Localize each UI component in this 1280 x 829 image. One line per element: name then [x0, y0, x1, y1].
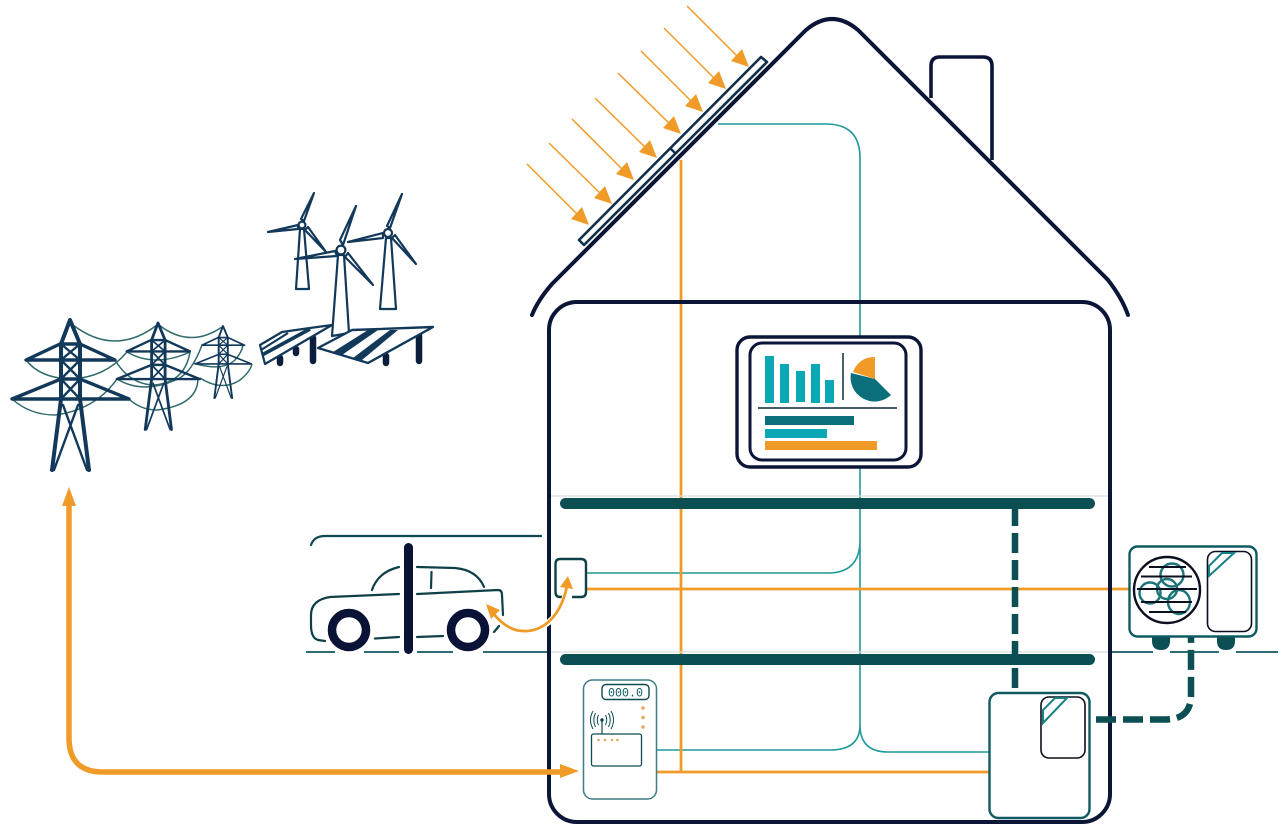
fan — [1134, 557, 1200, 623]
car charging arrow — [486, 576, 573, 631]
chimney — [931, 57, 992, 160]
solar panel on roof — [579, 57, 767, 245]
wind turbines — [268, 193, 416, 336]
floor slabs — [560, 498, 1095, 665]
panel legs — [280, 335, 419, 363]
grid feed arrow — [62, 487, 579, 778]
smart meter — [584, 680, 656, 799]
carport roof — [311, 536, 541, 545]
wallbox charger — [556, 559, 586, 597]
transmission tower large — [12, 320, 129, 470]
carport post — [404, 543, 413, 654]
tablet frame — [737, 337, 921, 467]
electrical wiring inside the house — [587, 124, 1130, 772]
transmission tower medium — [117, 323, 200, 430]
sunlight arrows — [527, 6, 749, 225]
bar chart — [765, 356, 834, 403]
heat pump outdoor unit — [1130, 546, 1256, 650]
wifi antenna — [590, 711, 614, 734]
status dots — [641, 706, 645, 729]
communication module — [592, 734, 642, 766]
solar field — [260, 325, 433, 364]
car wheels — [332, 613, 485, 647]
house walls — [549, 302, 1110, 822]
tablet dashboard — [737, 337, 921, 467]
dashed pipes between battery and heat pump — [1015, 508, 1191, 720]
right solar panel — [318, 327, 433, 363]
turbine 3 — [348, 194, 416, 309]
module LEDs — [597, 739, 619, 741]
floor slab guide lines — [551, 496, 1108, 652]
horizontal bars — [765, 416, 877, 450]
orange wiring — [587, 160, 1130, 772]
heat pump feet — [1152, 637, 1235, 650]
electric car — [311, 567, 503, 647]
divider lines — [842, 353, 844, 400]
battery storage unit — [990, 693, 1090, 818]
car body — [311, 567, 503, 641]
power line wires — [12, 325, 252, 415]
pie chart — [851, 357, 891, 402]
transmission tower small — [195, 326, 251, 398]
left solar panel — [260, 325, 332, 364]
ground line — [306, 651, 1278, 653]
meter display: 000.0 — [608, 686, 643, 700]
turbine 2 — [295, 206, 373, 336]
teal wiring — [587, 124, 990, 752]
house roof — [532, 19, 1128, 315]
turbine 1 — [268, 193, 326, 289]
